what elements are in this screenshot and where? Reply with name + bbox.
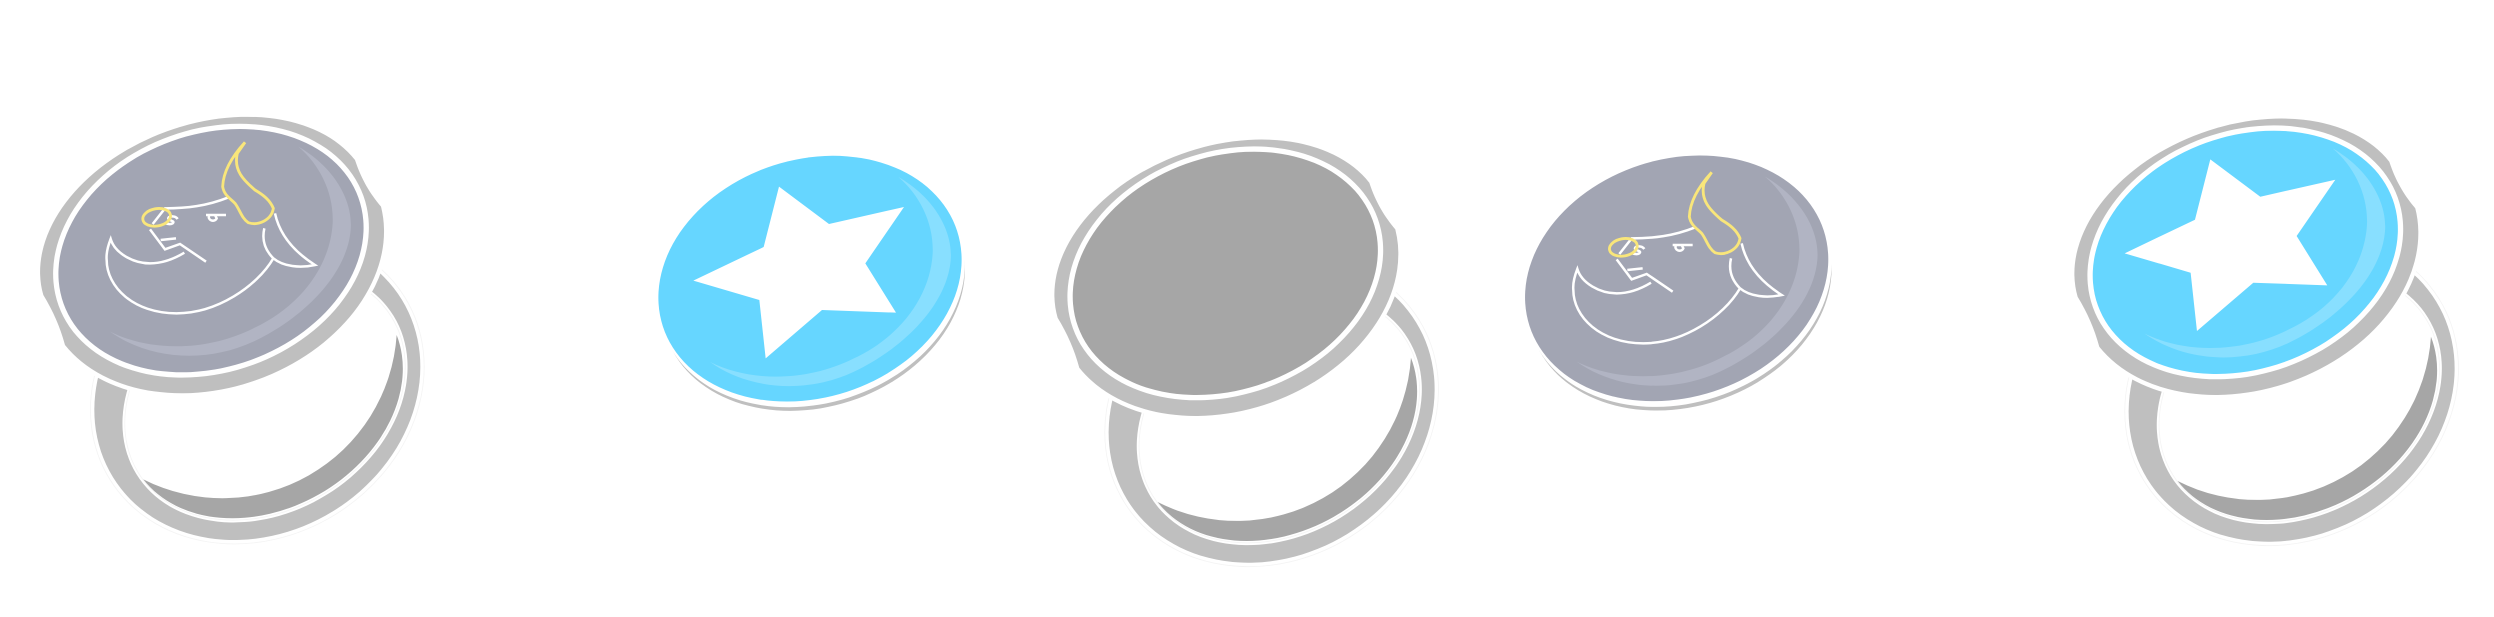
ring 1: grey stone with bull <box>17 81 483 605</box>
ring 1 highlight <box>110 147 351 356</box>
button 4 bull icon <box>1573 172 1782 343</box>
ring 3: blank grey stone <box>1032 104 1497 617</box>
button 2 star icon <box>693 187 904 358</box>
button 2 face <box>626 118 994 440</box>
ring 1 band and plate <box>17 81 483 605</box>
button 4 face <box>1493 117 1861 439</box>
button 4 highlight <box>1577 177 1818 386</box>
button 2: blue with star <box>626 118 997 449</box>
button 2 highlight <box>710 177 951 386</box>
ring 3 band and plate <box>1032 104 1497 617</box>
ring 5 star icon <box>2125 159 2335 331</box>
ring 3 face <box>1038 111 1412 436</box>
ring 5 face <box>2058 90 2432 415</box>
ring 1 bull icon <box>107 142 315 313</box>
ring 5: blue stone with star <box>2052 83 2494 607</box>
button 4 base <box>1493 121 1864 449</box>
button 4: grey with bull <box>1493 117 1864 449</box>
ring 1 face <box>24 88 398 413</box>
ring 5 band and plate <box>2052 83 2494 607</box>
button 2 base <box>627 121 997 449</box>
ring 5 highlight <box>2144 148 2385 357</box>
